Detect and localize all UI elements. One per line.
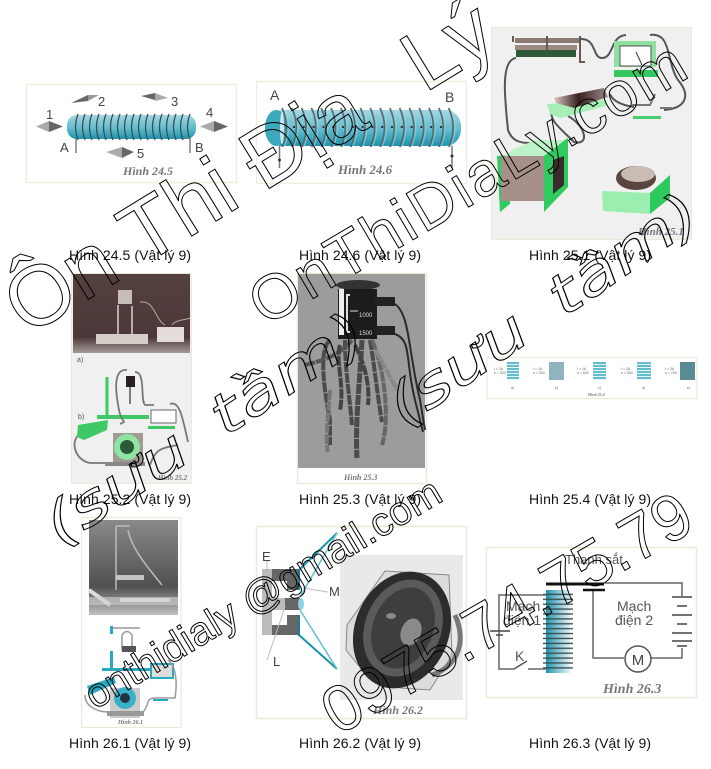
captions: Hình 26.3 (Vật lý 9) (529, 735, 651, 751)
captions: Hình 24.6 (Vật lý 9) (299, 247, 421, 263)
small annotations: b) (555, 386, 558, 390)
small annotations: I = 1A (533, 367, 543, 371)
small annotations: a) (511, 386, 514, 390)
watermark outlines: (sưu tầm) (32, 299, 378, 559)
figure tag: Hình 26.2 (372, 703, 423, 717)
dial (107, 687, 144, 718)
labels (46, 94, 213, 161)
terminal dots (280, 156, 452, 160)
speaker photo (336, 555, 468, 703)
small annotations: I = 1A (494, 367, 504, 371)
labels: B (445, 89, 454, 105)
labels (503, 552, 653, 664)
captions: Hình 25.1 (Vật lý 9) (529, 247, 651, 263)
figure tag: Hình 25.4 (587, 392, 605, 397)
small annotations: n = 500 (577, 371, 589, 375)
labels: điện 1 (503, 612, 541, 628)
wires (85, 660, 176, 712)
labels: Mạch (506, 598, 540, 614)
labels: B (195, 140, 204, 155)
paper clips (305, 340, 398, 458)
labels: 4 (206, 105, 213, 120)
solenoid (87, 677, 116, 695)
captions: Hình 26.2 (Vật lý 9) (299, 735, 421, 751)
small annotations: n = 500 (533, 371, 545, 375)
solenoid (547, 88, 608, 118)
schematic stand (102, 626, 174, 671)
leads (395, 304, 425, 432)
panel: Hinh 26.1 photo and schematic (82, 518, 181, 728)
figure tag: Hình 25.2 (157, 474, 188, 482)
small annotations (494, 367, 690, 390)
switch (153, 699, 168, 701)
panel: Hinh 25.1 apparatus (492, 28, 692, 240)
small annotations: I = 1A (577, 367, 587, 371)
small annotations: d) (642, 386, 645, 390)
rheostat (513, 36, 585, 62)
labels: Thanh sắt (565, 552, 623, 567)
captions: Hình 25.2 (Vật lý 9) (69, 491, 191, 507)
watermark outlines: onthidialy @gmail.com (76, 468, 449, 718)
terminals (280, 146, 452, 168)
labels: K (515, 648, 525, 664)
small annotations: c) (598, 386, 601, 390)
small annotations: e) (687, 386, 690, 390)
switch K (514, 661, 527, 669)
battery left (490, 631, 510, 635)
core and coil (543, 590, 573, 673)
wires (75, 370, 188, 465)
panel: Hinh 25.4 five coils (487, 358, 697, 398)
figure tag: Hình 26.1 (117, 720, 143, 726)
label a: a) (77, 357, 83, 364)
dial (105, 433, 145, 466)
labels (270, 87, 454, 105)
figure tag: Hình 26.3 (602, 682, 661, 697)
motor: M (632, 652, 644, 669)
battery stand (497, 138, 568, 212)
captions: Hình 24.5 (Vật lý 9) (69, 247, 191, 263)
coil cylinder (265, 107, 461, 147)
labels: L (273, 654, 280, 669)
labels: A (60, 140, 69, 155)
labels: 2 (98, 94, 105, 109)
captions: Hình 26.1 (Vật lý 9) (69, 735, 191, 751)
ammeter (614, 41, 658, 77)
iron bars (546, 582, 604, 586)
switch (632, 94, 672, 108)
figure tag: Hình 25.1 (637, 226, 684, 238)
labels: A (270, 87, 280, 103)
terminal wires (76, 138, 190, 153)
coils a to e (507, 362, 695, 380)
dial on box (602, 166, 670, 214)
switch base (633, 116, 661, 119)
panel: Hinh 25.3 photo of paper clips (298, 274, 426, 484)
coil cylinder (67, 113, 196, 141)
battery right (671, 596, 693, 648)
captions: Hình 25.4 (Vật lý 9) (529, 491, 651, 507)
labels: 3 (171, 94, 178, 109)
electromagnet (336, 280, 395, 339)
electromagnet: 1500 (359, 331, 373, 337)
photo background (298, 274, 425, 468)
labels: E (262, 549, 271, 564)
figure tag: Hình 24.6 (337, 162, 393, 177)
small annotations: n = 700 (665, 371, 677, 375)
captions (69, 247, 651, 751)
watermark outlines: OnThiDiaLy.com (237, 26, 700, 339)
labels: điện 2 (615, 612, 653, 628)
battery cells (672, 597, 692, 646)
labels (262, 549, 340, 669)
meter (151, 664, 173, 678)
contact bar (583, 589, 605, 591)
schematic stand (97, 376, 149, 419)
small annotations: n = 500 (621, 371, 633, 375)
wires (505, 35, 685, 143)
label b: b) (78, 414, 84, 421)
meter (148, 410, 176, 429)
circuits (499, 583, 682, 669)
small annotations: I = 2A (621, 367, 631, 371)
panel: Hinh 24.5 coil with compass arrows (26, 84, 236, 182)
figure tag: Hình 24.5 (122, 164, 173, 178)
photo a (89, 520, 178, 615)
labels: Mạch (617, 598, 651, 614)
panel: Hinh 26.3 electromagnetic relay (486, 548, 696, 698)
small annotations: n = 500 (494, 371, 506, 375)
panel: Hinh 26.2 loudspeaker (256, 526, 468, 718)
captions: Hình 25.3 (Vật lý 9) (299, 491, 421, 507)
labels: 5 (137, 146, 144, 161)
solenoid (77, 420, 108, 440)
panel: Hinh 24.6 coil (256, 82, 466, 184)
watermark outlines: 0975.74.75.79 (308, 477, 705, 748)
watermark outlines: (sưu tầm) (375, 180, 711, 440)
speaker diagram (262, 533, 337, 669)
motor (625, 646, 651, 672)
photo a (73, 274, 190, 353)
compass needles (36, 93, 228, 158)
panel: Hinh 25.2 photo and schematic (72, 274, 192, 484)
labels: M (329, 584, 340, 599)
electromagnet: 1000 (359, 313, 373, 319)
labels: 1 (46, 107, 53, 122)
small annotations: I = 2A (665, 367, 675, 371)
figure tag: Hình 25.3 (343, 473, 377, 482)
